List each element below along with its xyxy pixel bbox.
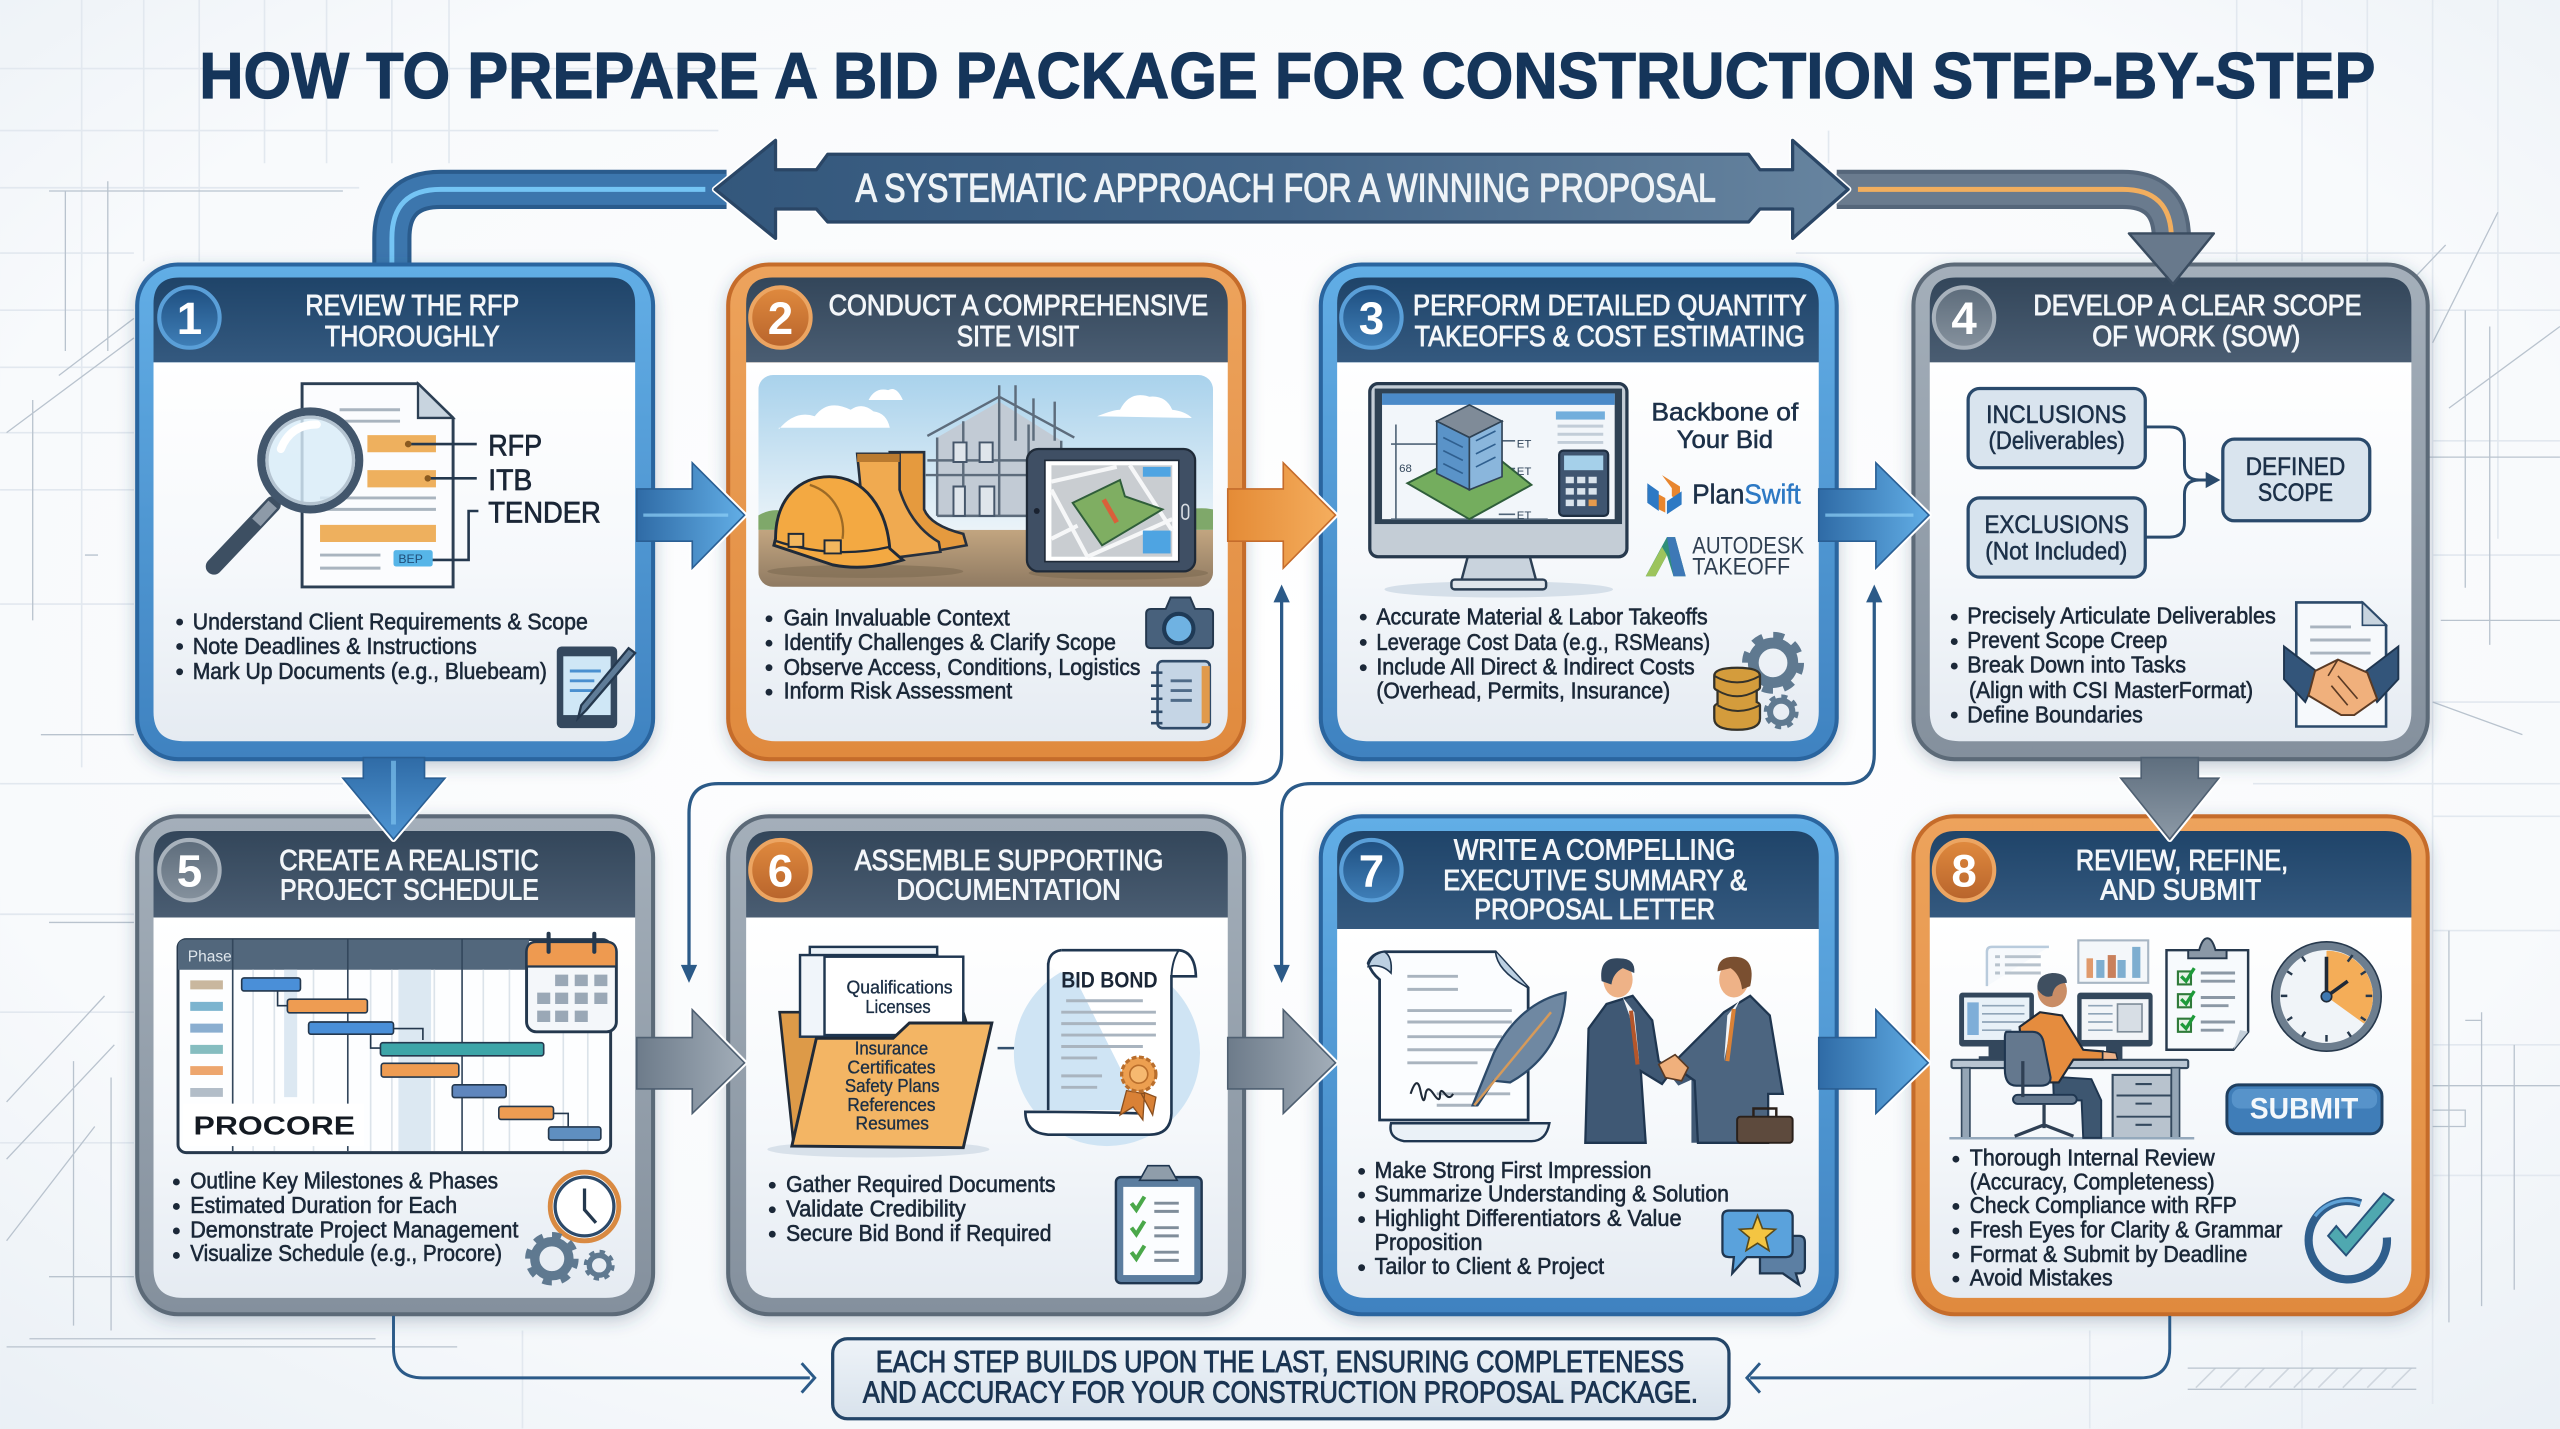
bullets step 3: Leverage Cost Data (e.g., RSMeans) bbox=[1376, 629, 1710, 655]
diagram: inclusions and exclusions to defined scope: DEFINED bbox=[2246, 453, 2345, 481]
illustration: document folder: Insurance bbox=[855, 1038, 928, 1059]
icon: camera bbox=[1146, 598, 1213, 648]
chart: gantt schedule bbox=[178, 940, 611, 1153]
panel: step 3 bbox=[1321, 264, 1837, 759]
arrow: step 4 down to step 8 bbox=[2121, 758, 2219, 839]
button: submit: SUBMIT bbox=[2250, 1092, 2358, 1125]
step number 5 bbox=[159, 840, 220, 900]
panel: step 5 bbox=[137, 816, 653, 1314]
illustration: monitor with building takeoff and calculator bbox=[1370, 384, 1627, 598]
summary box: EACH STEP BUILDS UPON THE LAST, ENSURING COMPLETENESS bbox=[876, 1346, 1684, 1379]
illustration: document folder: References bbox=[847, 1094, 936, 1115]
panel: step 6 bbox=[728, 816, 1244, 1314]
connector: step 5 to summary box bbox=[394, 1316, 815, 1393]
illustration: handshake between two professionals bbox=[1585, 957, 1793, 1143]
bullets step 4: Break Down into Tasks bbox=[1967, 652, 2186, 678]
banner: systematic approach bbox=[715, 140, 1848, 238]
heading step 7: PROPOSAL LETTER bbox=[1474, 894, 1715, 926]
bullets step 8: Check Compliance with RFP bbox=[1970, 1192, 2237, 1218]
diagram: inclusions and exclusions to defined scope: (Deliverables) bbox=[1989, 427, 2125, 455]
panel: step 1 bbox=[137, 264, 653, 759]
bullets step 8: Avoid Mistakes bbox=[1970, 1265, 2113, 1291]
heading step 5 bbox=[279, 845, 539, 907]
bullets step 8: Format & Submit by Deadline bbox=[1970, 1241, 2247, 1267]
illustration: document folder bbox=[767, 947, 992, 1158]
panel: step 7 bbox=[1321, 816, 1837, 1314]
step number 2: 2 bbox=[768, 293, 793, 344]
thin connectors between rows bbox=[681, 584, 1882, 983]
bullets step 4: Prevent Scope Creep bbox=[1967, 627, 2167, 653]
bullets step 7: Proposition bbox=[1375, 1229, 1482, 1255]
bullets step 6: Secure Bid Bond if Required bbox=[786, 1220, 1051, 1246]
bullets step 2: Gain Invaluable Context bbox=[784, 604, 1010, 630]
illustration: document folder: Resumes bbox=[856, 1113, 929, 1134]
icon: checklist bbox=[2166, 938, 2248, 1050]
arrow: step 1 down to step 5 bbox=[343, 758, 445, 839]
heading step 8: AND SUBMIT bbox=[2100, 875, 2261, 907]
step number 8: 8 bbox=[1951, 845, 1977, 896]
illustration: monitor with building takeoff and calculator: 68 bbox=[1399, 463, 1412, 475]
heading step 2: SITE VISIT bbox=[957, 321, 1079, 353]
arrow: step 5 to step 6 bbox=[637, 1010, 745, 1113]
heading step 2: CONDUCT A COMPREHENSIVE bbox=[829, 290, 1208, 322]
text: backbone of your bid: Backbone of bbox=[1651, 398, 1799, 426]
icon: contract with handshake bbox=[2284, 602, 2398, 726]
heading step 5: PROJECT SCHEDULE bbox=[280, 875, 539, 907]
step number 6 bbox=[750, 840, 811, 900]
logo: PlanSwift: PlanSwift bbox=[1692, 478, 1801, 509]
arrow: step 1 to step 2 bbox=[637, 463, 745, 568]
bullets step 3: (Overhead, Permits, Insurance) bbox=[1376, 678, 1670, 704]
arrow: step 6 to step 7 bbox=[1228, 1010, 1336, 1113]
illustration: bid bond scroll: BID BOND bbox=[1061, 968, 1158, 993]
chart: gantt schedule: Phase bbox=[188, 949, 232, 966]
panel: step 8 bbox=[1913, 816, 2428, 1314]
bullets step 7: Make Strong First Impression bbox=[1375, 1157, 1651, 1183]
heading step 1: REVIEW THE RFP bbox=[305, 290, 519, 322]
title: HOW TO PREPARE A BID PACKAGE FOR CONSTRUCTION STEP-BY-STEP bbox=[199, 40, 2375, 112]
illustration: monitor with building takeoff and calculator: ET bbox=[1517, 438, 1531, 450]
bullets step 7: Tailor to Client & Project bbox=[1375, 1253, 1605, 1279]
icon: checklist clipboard bbox=[1116, 1166, 1202, 1283]
bullets step 2 bbox=[766, 604, 1140, 704]
bullets step 6: Gather Required Documents bbox=[786, 1171, 1056, 1197]
illustration: reviewer at desk bbox=[1949, 940, 2194, 1138]
bullets step 5: Estimated Duration for Each bbox=[190, 1192, 457, 1218]
logo: Procore: PROCORE bbox=[194, 1111, 355, 1141]
heading step 6: ASSEMBLE SUPPORTING bbox=[855, 845, 1163, 877]
step number 7 bbox=[1341, 840, 1402, 900]
heading step 4: DEVELOP A CLEAR SCOPE bbox=[2033, 290, 2362, 322]
bullets step 2: Inform Risk Assessment bbox=[784, 678, 1013, 704]
bullets step 6 bbox=[769, 1171, 1056, 1246]
icon: speech bubbles with star bbox=[1722, 1211, 1805, 1285]
heading step 2 bbox=[829, 290, 1208, 353]
heading step 1 bbox=[305, 290, 519, 353]
text: backbone of your bid: Your Bid bbox=[1677, 426, 1773, 454]
illustration: construction site bbox=[758, 375, 1213, 587]
heading step 3: TAKEOFFS & COST ESTIMATING bbox=[1415, 321, 1805, 353]
bullets step 2: Identify Challenges & Clarify Scope bbox=[784, 629, 1116, 655]
icon: tablet and stylus bbox=[557, 647, 635, 728]
illustration: document with magnifier: BEP bbox=[398, 552, 423, 566]
bullets step 6: Validate Credibility bbox=[786, 1195, 966, 1221]
panel: step 2 bbox=[728, 264, 1244, 759]
bullets step 8: (Accuracy, Completeness) bbox=[1970, 1169, 2215, 1195]
arrow: step 3 to step 4 bbox=[1819, 463, 1929, 568]
bullets step 4: (Align with CSI MasterFormat) bbox=[1969, 677, 2253, 703]
bullets step 4: Define Boundaries bbox=[1967, 701, 2143, 727]
heading step 7 bbox=[1443, 835, 1747, 926]
bullets step 3: Accurate Material & Labor Takeoffs bbox=[1376, 603, 1708, 629]
diagram: inclusions and exclusions to defined scope bbox=[1968, 389, 2370, 577]
illustration: document folder: Safety Plans bbox=[845, 1075, 940, 1096]
bullets step 1: Note Deadlines & Instructions bbox=[193, 633, 477, 659]
illustration: document with magnifier: ITB bbox=[488, 464, 532, 497]
illustration: document folder: Licenses bbox=[865, 996, 931, 1017]
bullets step 7: Highlight Differentiators & Value bbox=[1375, 1205, 1682, 1231]
icon: ring checkmark bbox=[2309, 1193, 2393, 1279]
illustration: document with magnifier: RFP bbox=[488, 429, 542, 462]
heading step 3: PERFORM DETAILED QUANTITY bbox=[1413, 290, 1807, 322]
bullets step 8: Thorough Internal Review bbox=[1970, 1145, 2215, 1171]
step number 5: 5 bbox=[177, 845, 202, 896]
heading step 7: WRITE A COMPELLING bbox=[1454, 835, 1735, 867]
arrow: step 2 to step 3 bbox=[1228, 463, 1336, 568]
diagram: inclusions and exclusions to defined scope: INCLUSIONS bbox=[1986, 401, 2126, 429]
step number 1: 1 bbox=[177, 293, 202, 344]
heading step 4: OF WORK (SOW) bbox=[2092, 321, 2300, 353]
step number 3: 3 bbox=[1359, 293, 1384, 344]
icon: calendar bbox=[527, 934, 616, 1032]
illustration: bid bond scroll bbox=[1014, 950, 1200, 1146]
heading step 7: EXECUTIVE SUMMARY & bbox=[1443, 865, 1747, 897]
panel: step 4 bbox=[1913, 264, 2428, 759]
illustration: document folder: Certificates bbox=[847, 1056, 936, 1077]
bullets step 5 bbox=[173, 1168, 519, 1266]
heading step 4 bbox=[2033, 290, 2362, 353]
bullets step 5: Visualize Schedule (e.g., Procore) bbox=[190, 1240, 502, 1266]
step number 4 bbox=[1934, 287, 1994, 348]
banner: systematic approach: A SYSTEMATIC APPROACH FOR A WINNING PROPOSAL bbox=[856, 167, 1716, 211]
step number 8 bbox=[1934, 840, 1994, 900]
connector: folder to bid bond bbox=[998, 1047, 1041, 1049]
bullets step 3 bbox=[1360, 603, 1710, 704]
illustration: monitor with building takeoff and calculator: ET bbox=[1517, 466, 1531, 478]
step number 3 bbox=[1341, 287, 1402, 348]
logo: Autodesk Takeoff: TAKEOFF bbox=[1692, 555, 1790, 581]
bullets step 7 bbox=[1358, 1157, 1729, 1279]
bullets step 1: Mark Up Documents (e.g., Bluebeam) bbox=[193, 658, 547, 684]
illustration: document folder: Qualifications bbox=[847, 976, 953, 997]
button: submit bbox=[2227, 1085, 2382, 1134]
heading step 8: REVIEW, REFINE, bbox=[2076, 845, 2288, 877]
illustration: document with magnifier bbox=[214, 384, 601, 587]
heading step 3 bbox=[1413, 290, 1807, 353]
logo: PlanSwift bbox=[1647, 475, 1801, 514]
connector: banner to step 1 bbox=[392, 189, 727, 278]
bullets step 1: Understand Client Requirements & Scope bbox=[193, 608, 588, 634]
icon: clock and gears bbox=[529, 1172, 619, 1282]
connector: step 8 to summary box bbox=[1747, 1316, 2170, 1393]
heading step 1: THOROUGHLY bbox=[325, 321, 500, 353]
logo: Autodesk Takeoff: AUTODESK bbox=[1692, 533, 1804, 559]
illustration: document with magnifier: TENDER bbox=[488, 496, 601, 529]
illustration: monitor with building takeoff and calculator: ET bbox=[1517, 510, 1531, 522]
bullets step 3: Include All Direct & Indirect Costs bbox=[1376, 653, 1695, 679]
diagram: inclusions and exclusions to defined scope: SCOPE bbox=[2258, 479, 2333, 507]
icon: deadline clock bbox=[2272, 942, 2381, 1051]
heading step 8 bbox=[2076, 845, 2288, 907]
logo: Autodesk Takeoff bbox=[1646, 533, 1804, 581]
step number 6: 6 bbox=[768, 845, 793, 896]
text: backbone of your bid bbox=[1651, 398, 1799, 454]
summary box bbox=[833, 1339, 1729, 1419]
bullets step 2: Observe Access, Conditions, Logistics bbox=[784, 654, 1140, 680]
bullets step 7: Summarize Understanding & Solution bbox=[1375, 1181, 1729, 1207]
bullets step 4: Precisely Articulate Deliverables bbox=[1967, 603, 2276, 629]
illustration: proposal letter scroll and quill bbox=[1368, 952, 1566, 1141]
arrowhead: banner connector into step 4 bbox=[2129, 233, 2214, 284]
step number 1 bbox=[159, 287, 220, 348]
bullets step 1 bbox=[176, 608, 588, 684]
bullets step 5: Demonstrate Project Management bbox=[190, 1216, 519, 1242]
bullets step 5: Outline Key Milestones & Phases bbox=[190, 1168, 498, 1194]
bullets step 4 bbox=[1951, 603, 2276, 727]
diagram: inclusions and exclusions to defined scope: (Not Included) bbox=[1985, 538, 2127, 566]
heading step 5: CREATE A REALISTIC bbox=[279, 845, 539, 877]
heading step 6 bbox=[855, 845, 1163, 907]
step number 2 bbox=[750, 287, 811, 348]
bullets step 8 bbox=[1952, 1145, 2283, 1291]
icon: gears and coins bbox=[1714, 636, 1800, 730]
summary box: AND ACCURACY FOR YOUR CONSTRUCTION PROPOSAL PACKAGE. bbox=[863, 1376, 1698, 1409]
connector: banner to step 4 bbox=[1837, 189, 2171, 251]
step number 4: 4 bbox=[1951, 293, 1977, 344]
step number 7: 7 bbox=[1359, 845, 1384, 896]
diagram: inclusions and exclusions to defined scope: EXCLUSIONS bbox=[1984, 511, 2129, 539]
arrow: step 7 to step 8 bbox=[1819, 1010, 1928, 1113]
bullets step 8: Fresh Eyes for Clarity & Grammar bbox=[1970, 1216, 2283, 1242]
icon: notebook bbox=[1151, 661, 1210, 728]
heading step 6: DOCUMENTATION bbox=[896, 875, 1121, 907]
